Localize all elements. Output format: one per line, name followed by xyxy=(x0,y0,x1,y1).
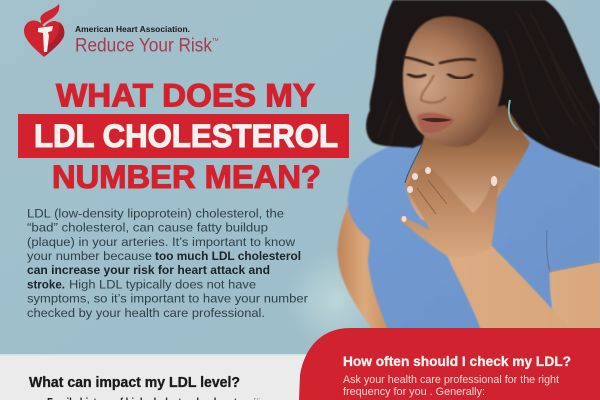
intro paragraph: your number because xyxy=(27,249,152,263)
logo: American Heart Association Reduce Your Risk xyxy=(24,4,219,57)
neck and chest xyxy=(405,105,530,222)
title line 1: WHAT DOES MY xyxy=(56,78,315,114)
intro paragraph: “bad” cholesterol, can cause fatty buildup xyxy=(27,221,268,235)
panel: how often should I check my LDL xyxy=(299,328,600,400)
hair xyxy=(366,0,600,168)
intro paragraph xyxy=(27,206,308,320)
eyebrows xyxy=(403,57,475,65)
intro paragraph: LDL (low-density lipoprotein) cholesterol, the xyxy=(27,206,284,220)
icon: heart and torch xyxy=(24,4,64,57)
right upper arm xyxy=(550,262,600,330)
neckline shadow xyxy=(405,142,423,183)
logo: American Heart Association Reduce Your Risk: TM xyxy=(212,37,219,42)
blue shirt xyxy=(348,136,600,330)
forearm xyxy=(447,245,570,330)
intro paragraph: stroke. xyxy=(27,277,65,291)
hand xyxy=(400,168,498,257)
eyes xyxy=(408,74,472,78)
hair curls xyxy=(378,10,598,150)
left arm xyxy=(337,205,392,330)
panel heading: What can impact my LDL level? xyxy=(29,375,240,391)
nose xyxy=(421,75,446,103)
title xyxy=(18,78,349,195)
intro paragraph: (plaque) in your arteries. It’s important to know xyxy=(27,235,295,249)
intro paragraph: High LDL typically does not have xyxy=(69,277,256,291)
intro paragraph: symptoms, so it’s important to have your number xyxy=(27,292,308,306)
shirt sleeve seam xyxy=(547,230,600,272)
finger lines xyxy=(417,180,447,214)
photo: woman holding her chest xyxy=(337,0,600,330)
title line 3: NUMBER MEAN? xyxy=(52,159,321,195)
intro paragraph: can increase your risk for heart attack and xyxy=(27,263,270,277)
organisation name: American Heart Association. xyxy=(75,25,190,34)
mouth xyxy=(417,113,455,133)
panel heading: How often should I check my LDL? xyxy=(343,353,571,369)
panel: what can impact my LDL level xyxy=(0,354,600,400)
program name: Reduce Your Risk xyxy=(75,36,212,56)
face xyxy=(403,16,503,147)
intro paragraph: too much LDL cholesterol xyxy=(155,249,301,263)
title highlight box: LDL CHOLESTEROL xyxy=(34,118,338,154)
panel text: Ask your health care professional for the right xyxy=(343,374,559,386)
finger nails xyxy=(402,167,497,222)
intro paragraph: checked by your health care professional. xyxy=(27,306,265,320)
panel: how often should I check my LDL: frequency for you . Generally: xyxy=(343,386,485,398)
earring xyxy=(509,100,518,130)
